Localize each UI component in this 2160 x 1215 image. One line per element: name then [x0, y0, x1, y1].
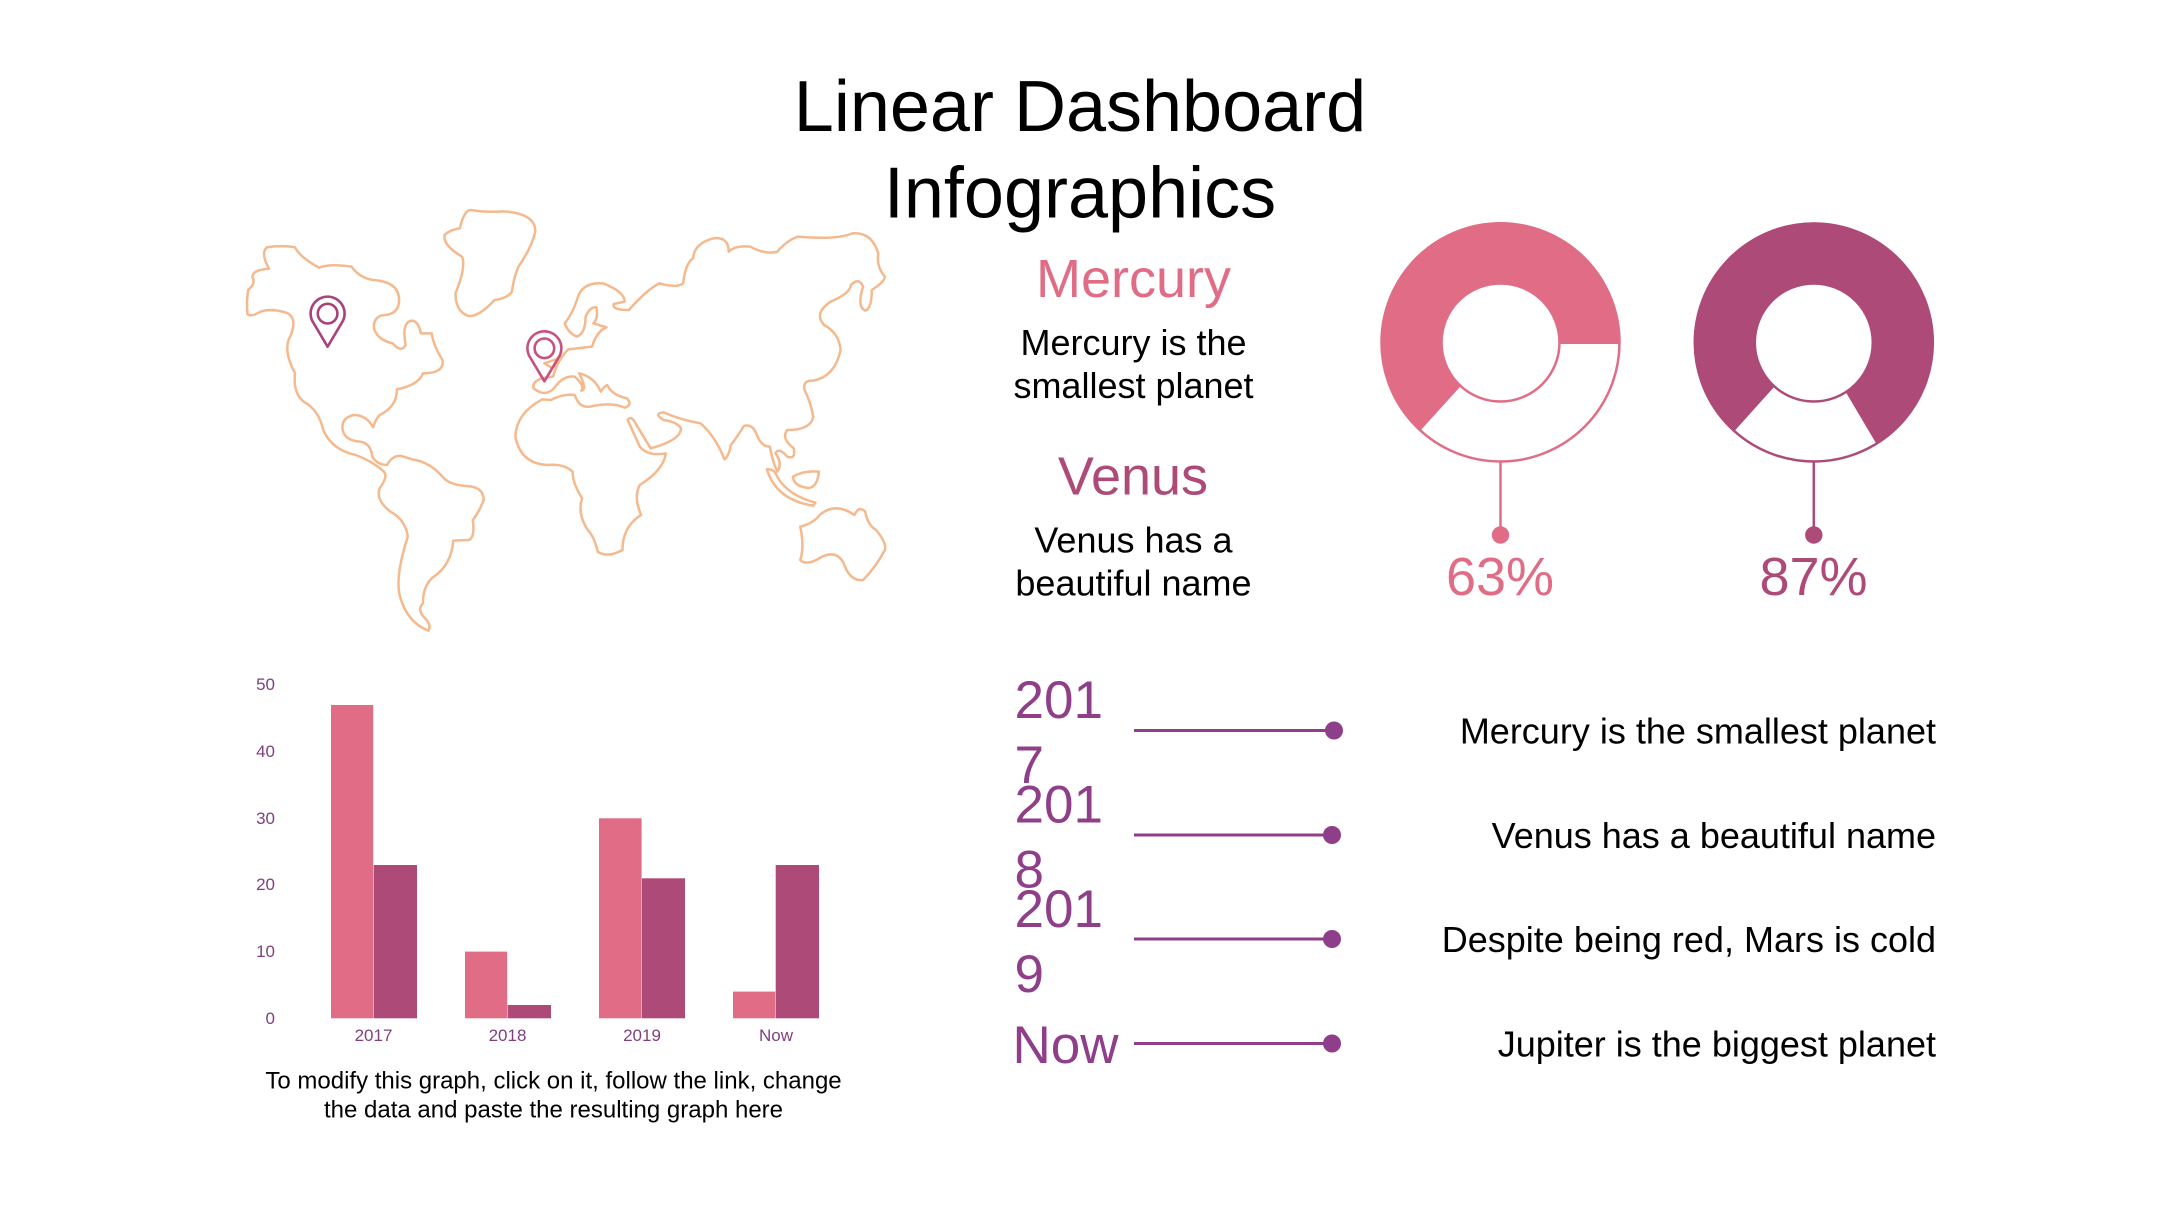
timeline row: now — [1012, 1016, 1936, 1075]
donut chart: 63%: 63% — [1446, 547, 1554, 607]
timeline row: now: Now — [1012, 1016, 1119, 1075]
text: venus description: beautiful name — [1015, 562, 1252, 604]
bars: second series — [374, 865, 819, 1018]
timeline row: 2017: 7 — [1014, 736, 1044, 795]
title: Linear Dashboard — [794, 67, 1366, 147]
x axis labels — [355, 1026, 794, 1045]
text: venus description — [1015, 520, 1252, 604]
timeline row: 2017: Mercury is the smallest planet — [1460, 710, 1936, 752]
heading: venus: Venus — [1058, 446, 1208, 506]
timeline row: 2017: 201 — [1014, 671, 1103, 730]
timeline row: 2017 — [1014, 671, 1936, 795]
x axis labels: Now — [759, 1026, 794, 1045]
timeline row: 2019: 201 — [1014, 880, 1103, 939]
donut chart: 63% — [1381, 222, 1621, 607]
timeline row: 2018: Venus has a beautiful name — [1492, 815, 1936, 856]
y axis labels: 50 — [256, 675, 275, 694]
timeline row: 2018 — [1014, 776, 1936, 900]
bar chart — [256, 675, 819, 1045]
chart caption: the data and paste the resulting graph here — [324, 1096, 783, 1124]
text: mercury description: smallest planet — [1013, 365, 1254, 406]
y axis labels: 20 — [256, 875, 275, 894]
timeline row: 2018: 8 — [1014, 840, 1044, 900]
icon: map pin north america — [311, 297, 345, 347]
text: mercury description — [1013, 322, 1254, 406]
bars: first series — [331, 705, 775, 1018]
donut chart: 87%: 87% — [1759, 547, 1868, 607]
timeline row: 2019: Despite being red, Mars is cold — [1442, 919, 1936, 960]
x axis labels: 2019 — [623, 1026, 661, 1045]
chart caption — [265, 1068, 842, 1124]
donut chart: 87% — [1694, 222, 1934, 607]
y axis labels: 40 — [256, 742, 275, 761]
heading: mercury: Mercury — [1036, 249, 1231, 309]
timeline row: 2019: 9 — [1014, 945, 1044, 1004]
y axis labels — [256, 675, 275, 1028]
timeline row: now: Jupiter is the biggest planet — [1498, 1024, 1936, 1064]
panel: mercury text — [1013, 249, 1254, 406]
text: venus description: Venus has a — [1034, 520, 1234, 560]
title: Infographics — [884, 154, 1276, 234]
y axis labels: 10 — [256, 942, 275, 961]
chart caption: To modify this graph, click on it, follow the link, change — [265, 1068, 842, 1094]
world map — [247, 210, 885, 631]
panel: venus text — [1015, 446, 1252, 604]
x axis labels: 2018 — [489, 1026, 526, 1045]
y axis labels: 30 — [256, 809, 275, 828]
timeline row: 2018: 201 — [1014, 776, 1103, 834]
title — [794, 67, 1366, 234]
timeline row: 2019 — [1014, 880, 1936, 1004]
text: mercury description: Mercury is the — [1020, 322, 1247, 363]
map outlines — [247, 210, 885, 631]
y axis labels: 0 — [266, 1009, 275, 1028]
icon: map pin europe — [527, 331, 561, 381]
x axis labels: 2017 — [355, 1026, 392, 1045]
